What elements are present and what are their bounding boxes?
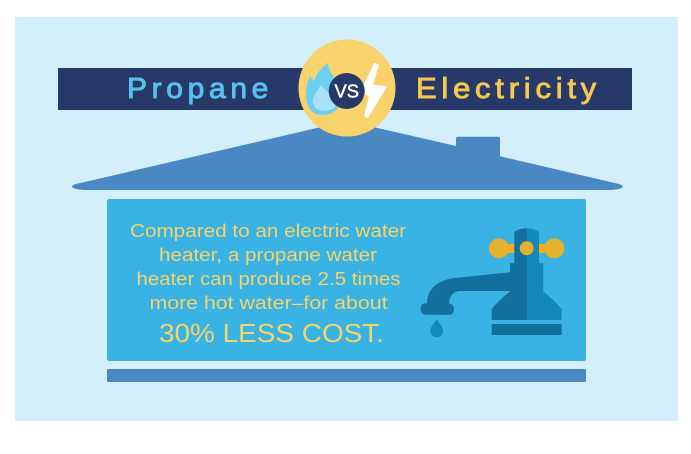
vs badge (298, 40, 396, 136)
faucet body right (527, 228, 562, 320)
banner bar (58, 68, 632, 110)
title banner (58, 68, 632, 110)
line 2: heater, a propane water (159, 245, 377, 265)
vs circle (329, 73, 365, 109)
house floor bar (107, 369, 586, 382)
faucet spout (421, 272, 510, 315)
faucet body left (492, 228, 527, 320)
heading: Electricity: Electricity (416, 73, 601, 105)
handle knobs (489, 238, 564, 258)
icon: faucet (421, 228, 564, 337)
house roof with chimney (72, 121, 623, 190)
text block: comparison (130, 221, 406, 348)
faucet base plate (492, 324, 562, 335)
line 1: Compared to an electric water (130, 221, 406, 241)
badge circle (298, 40, 396, 136)
handle connectors (508, 244, 545, 253)
icon: flame (306, 63, 341, 115)
house body panel (107, 199, 586, 361)
heading: Propane: Propane (127, 73, 273, 105)
water drop (430, 319, 443, 337)
line 3: heater can produce 2.5 times (136, 269, 400, 289)
line 4: more hot water–for about (150, 293, 388, 313)
callout: 30% less cost: 30% LESS COST. (159, 318, 384, 348)
icon: lightning bolt (361, 64, 386, 117)
vs label: VS (334, 82, 359, 102)
